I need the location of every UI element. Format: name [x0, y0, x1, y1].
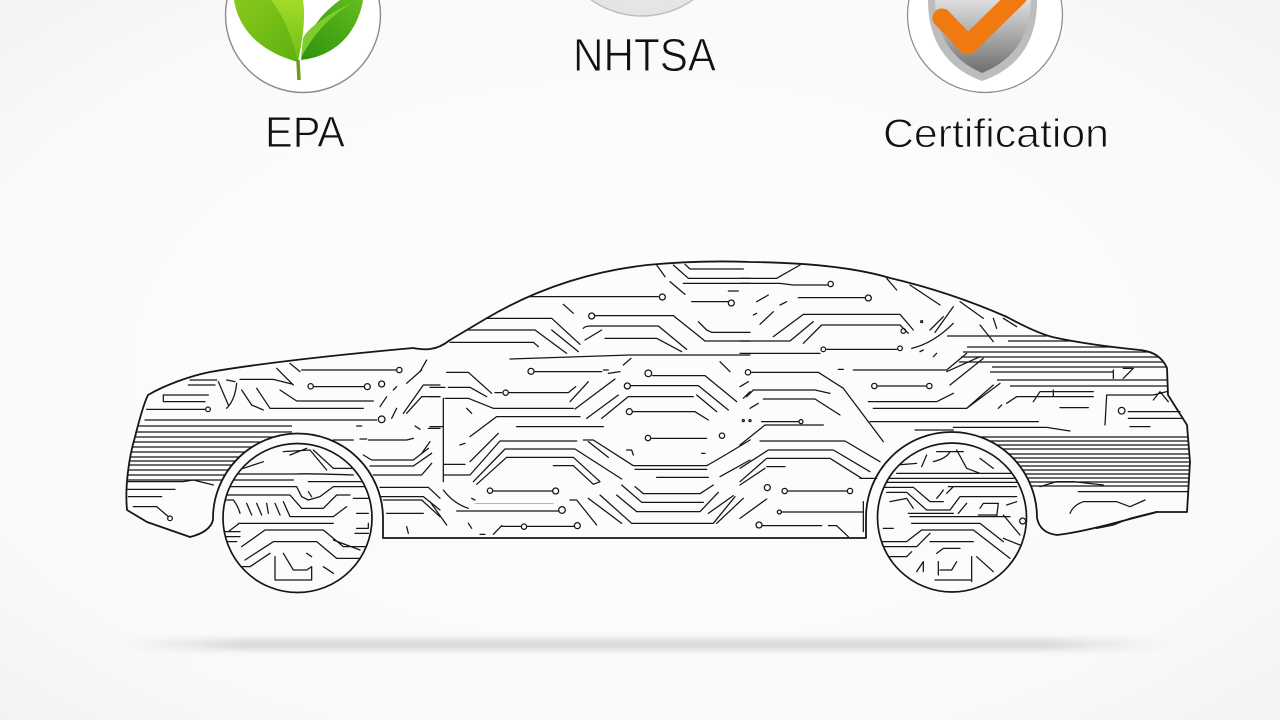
- badge: Certification: [883, 0, 1109, 156]
- circuit traces: rear section: [740, 265, 1188, 537]
- horizontal stripes: [120, 336, 1200, 486]
- rear wheel: [878, 443, 1026, 592]
- car body outline: [126, 261, 1190, 538]
- icon: certification shield with check: [908, 0, 1062, 92]
- front wheel: [223, 444, 372, 592]
- icon: EPA circle with leaves: [226, 0, 380, 92]
- car with circuit pattern: [120, 261, 1200, 592]
- circuit traces: centre section: [430, 264, 750, 534]
- circuit traces: front section: [127, 360, 440, 533]
- badge: NHTSA: [554, 0, 730, 81]
- label: NHTSA: NHTSA: [573, 29, 716, 81]
- label: Certification: Certification: [883, 112, 1109, 156]
- badge: EPA: [226, 0, 380, 157]
- label: EPA: EPA: [265, 108, 346, 157]
- ground shadow: [120, 639, 1170, 650]
- icon: NHTSA circle: [554, 0, 730, 16]
